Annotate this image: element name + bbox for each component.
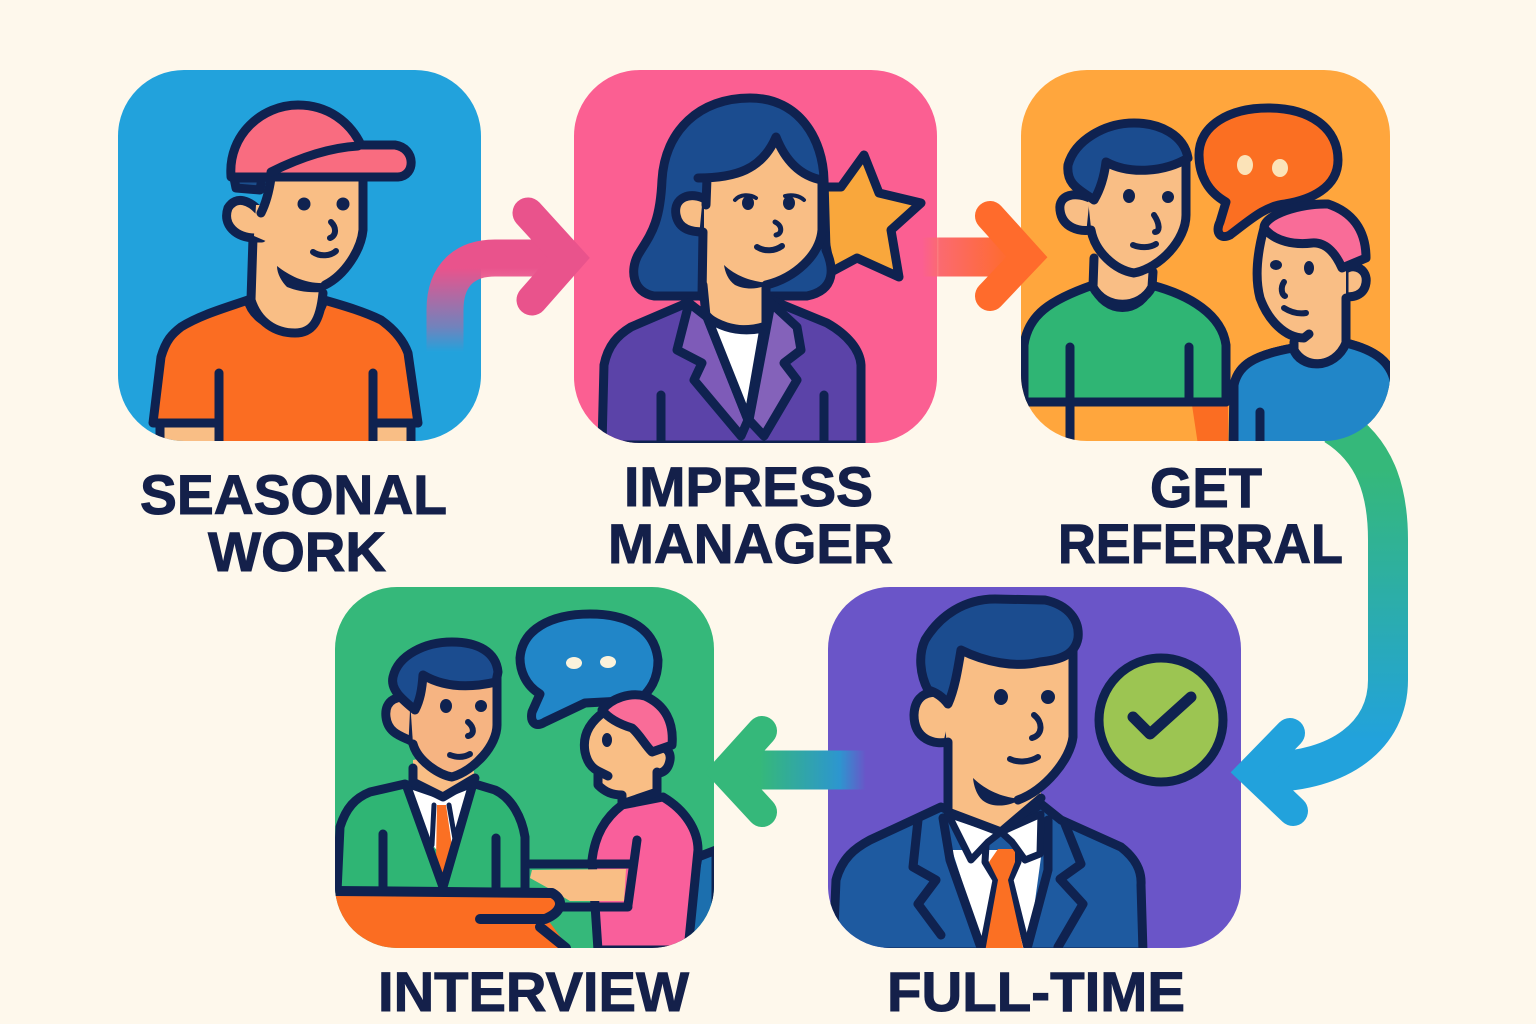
heading: full-time: FULL-TIME <box>887 960 1185 1023</box>
panel: seasonal work <box>118 70 481 450</box>
icon: star <box>815 155 921 277</box>
icon: candidate <box>530 695 698 950</box>
arrow: seasonal work to impress manager <box>445 213 569 352</box>
lower orange stripe <box>1192 406 1228 441</box>
arrow: get referral to full-time <box>1252 425 1388 811</box>
icon: worker shirt <box>153 300 418 450</box>
panel: get referral <box>1021 70 1395 445</box>
icon: table <box>335 891 570 950</box>
arrow: full-time to interview <box>725 731 866 812</box>
panel: full-time <box>828 587 1241 952</box>
heading: impress manager: MANAGER <box>608 512 893 575</box>
icon: worker head and cap <box>227 105 411 333</box>
icon: man in green shirt <box>1024 123 1226 445</box>
icon: interviewer <box>337 642 525 892</box>
icon: employee <box>833 599 1143 952</box>
icon: orange speech bubble <box>1199 108 1338 237</box>
heading: seasonal work: SEASONAL <box>140 463 447 526</box>
icon: manager <box>602 98 861 445</box>
heading: interview: INTERVIEW <box>378 960 689 1023</box>
heading: seasonal work: WORK <box>208 520 386 583</box>
icon: green check badge <box>1099 658 1223 782</box>
heading: get referral: GET <box>1150 456 1262 519</box>
heading: impress manager: IMPRESS <box>624 455 873 518</box>
icon: man in blue shirt <box>1233 204 1395 445</box>
panel: interview <box>335 587 716 950</box>
panel: impress manager <box>574 70 937 445</box>
heading: get referral: REFERRAL <box>1058 512 1343 575</box>
panel corner covering arrow start <box>1233 343 1395 445</box>
arrow: impress manager to get referral <box>922 216 1027 296</box>
icon: blue speech bubble <box>520 614 658 724</box>
icon: chair <box>682 850 716 940</box>
